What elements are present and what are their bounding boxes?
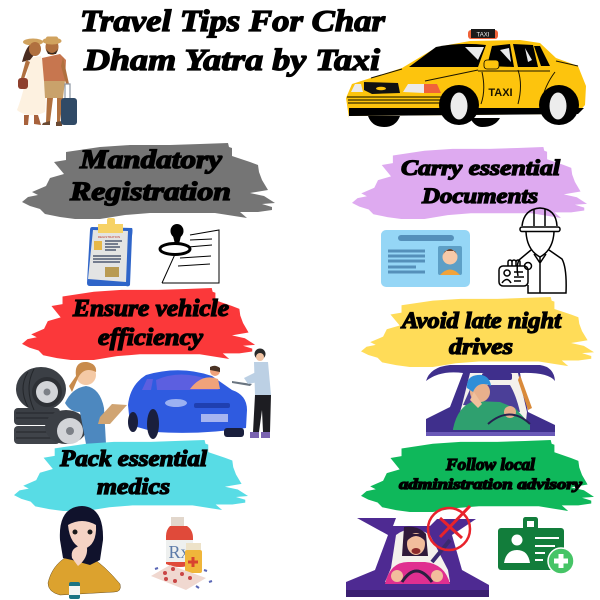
brush: red — [22, 288, 255, 360]
icon: blue car under inspection — [128, 366, 247, 439]
icon: travelling couple with suitcase — [17, 36, 77, 126]
brush: purple — [352, 147, 587, 219]
heading: Documents — [421, 183, 538, 208]
icon: green id badge with plus — [498, 517, 574, 574]
title — [80, 3, 386, 77]
panel: mandatory registration — [22, 143, 275, 286]
heading — [59, 446, 208, 499]
icon: inspector with clipboard — [232, 348, 271, 438]
heading: medics — [97, 474, 170, 499]
panel: ensure vehicle efficiency — [14, 288, 271, 444]
brush: yellow — [361, 297, 594, 367]
heading: Carry essential — [401, 155, 561, 180]
icon: woman taking pill — [48, 506, 120, 599]
heading — [69, 145, 231, 206]
heading: Pack essential — [59, 446, 208, 471]
panel: avoid late night drives — [361, 297, 594, 436]
icon: scared driver in car — [346, 518, 489, 597]
brush: cyan — [14, 440, 248, 511]
icon: yellow taxi: TAXI — [488, 87, 513, 99]
heading: Mandatory — [79, 145, 223, 174]
icon: yellow taxi — [346, 29, 586, 127]
icon: medicine bottles and pills — [151, 517, 212, 590]
panel: carry essential documents — [352, 147, 587, 293]
heading — [401, 155, 561, 208]
heading: Ensure vehicle — [72, 296, 229, 322]
title: Travel Tips For Char — [80, 3, 386, 38]
heading — [400, 308, 562, 359]
heading — [72, 296, 229, 351]
icon: worker holding id badge — [499, 208, 566, 293]
icon: registration clipboard: REGISTRATION — [98, 235, 120, 239]
heading: drives — [449, 334, 513, 359]
panel: follow local administration advisory — [346, 440, 594, 597]
icon: tired driver in car — [426, 365, 555, 436]
icon: id card — [381, 230, 470, 287]
title: Dham Yatra by Taxi — [83, 42, 380, 77]
icon: stacked tyres — [14, 367, 87, 444]
icon: yellow taxi: TAXI — [477, 32, 490, 38]
brush: grey — [22, 143, 275, 219]
icon: registration clipboard — [87, 218, 132, 286]
heading: Avoid late night — [400, 308, 562, 333]
heading: Registration — [69, 177, 231, 206]
heading: Follow local — [445, 455, 535, 474]
panel: pack essential medics — [14, 440, 248, 599]
icon: stamp on paper — [160, 224, 219, 283]
brush: green — [361, 440, 594, 512]
heading — [399, 455, 582, 493]
icon: medicine bottles and pills: Rx — [168, 542, 190, 562]
heading: efficiency — [98, 325, 203, 351]
icon: red prohibition mark — [428, 506, 470, 550]
heading: administration advisory — [399, 477, 582, 493]
icon: mechanic woman — [65, 362, 127, 444]
